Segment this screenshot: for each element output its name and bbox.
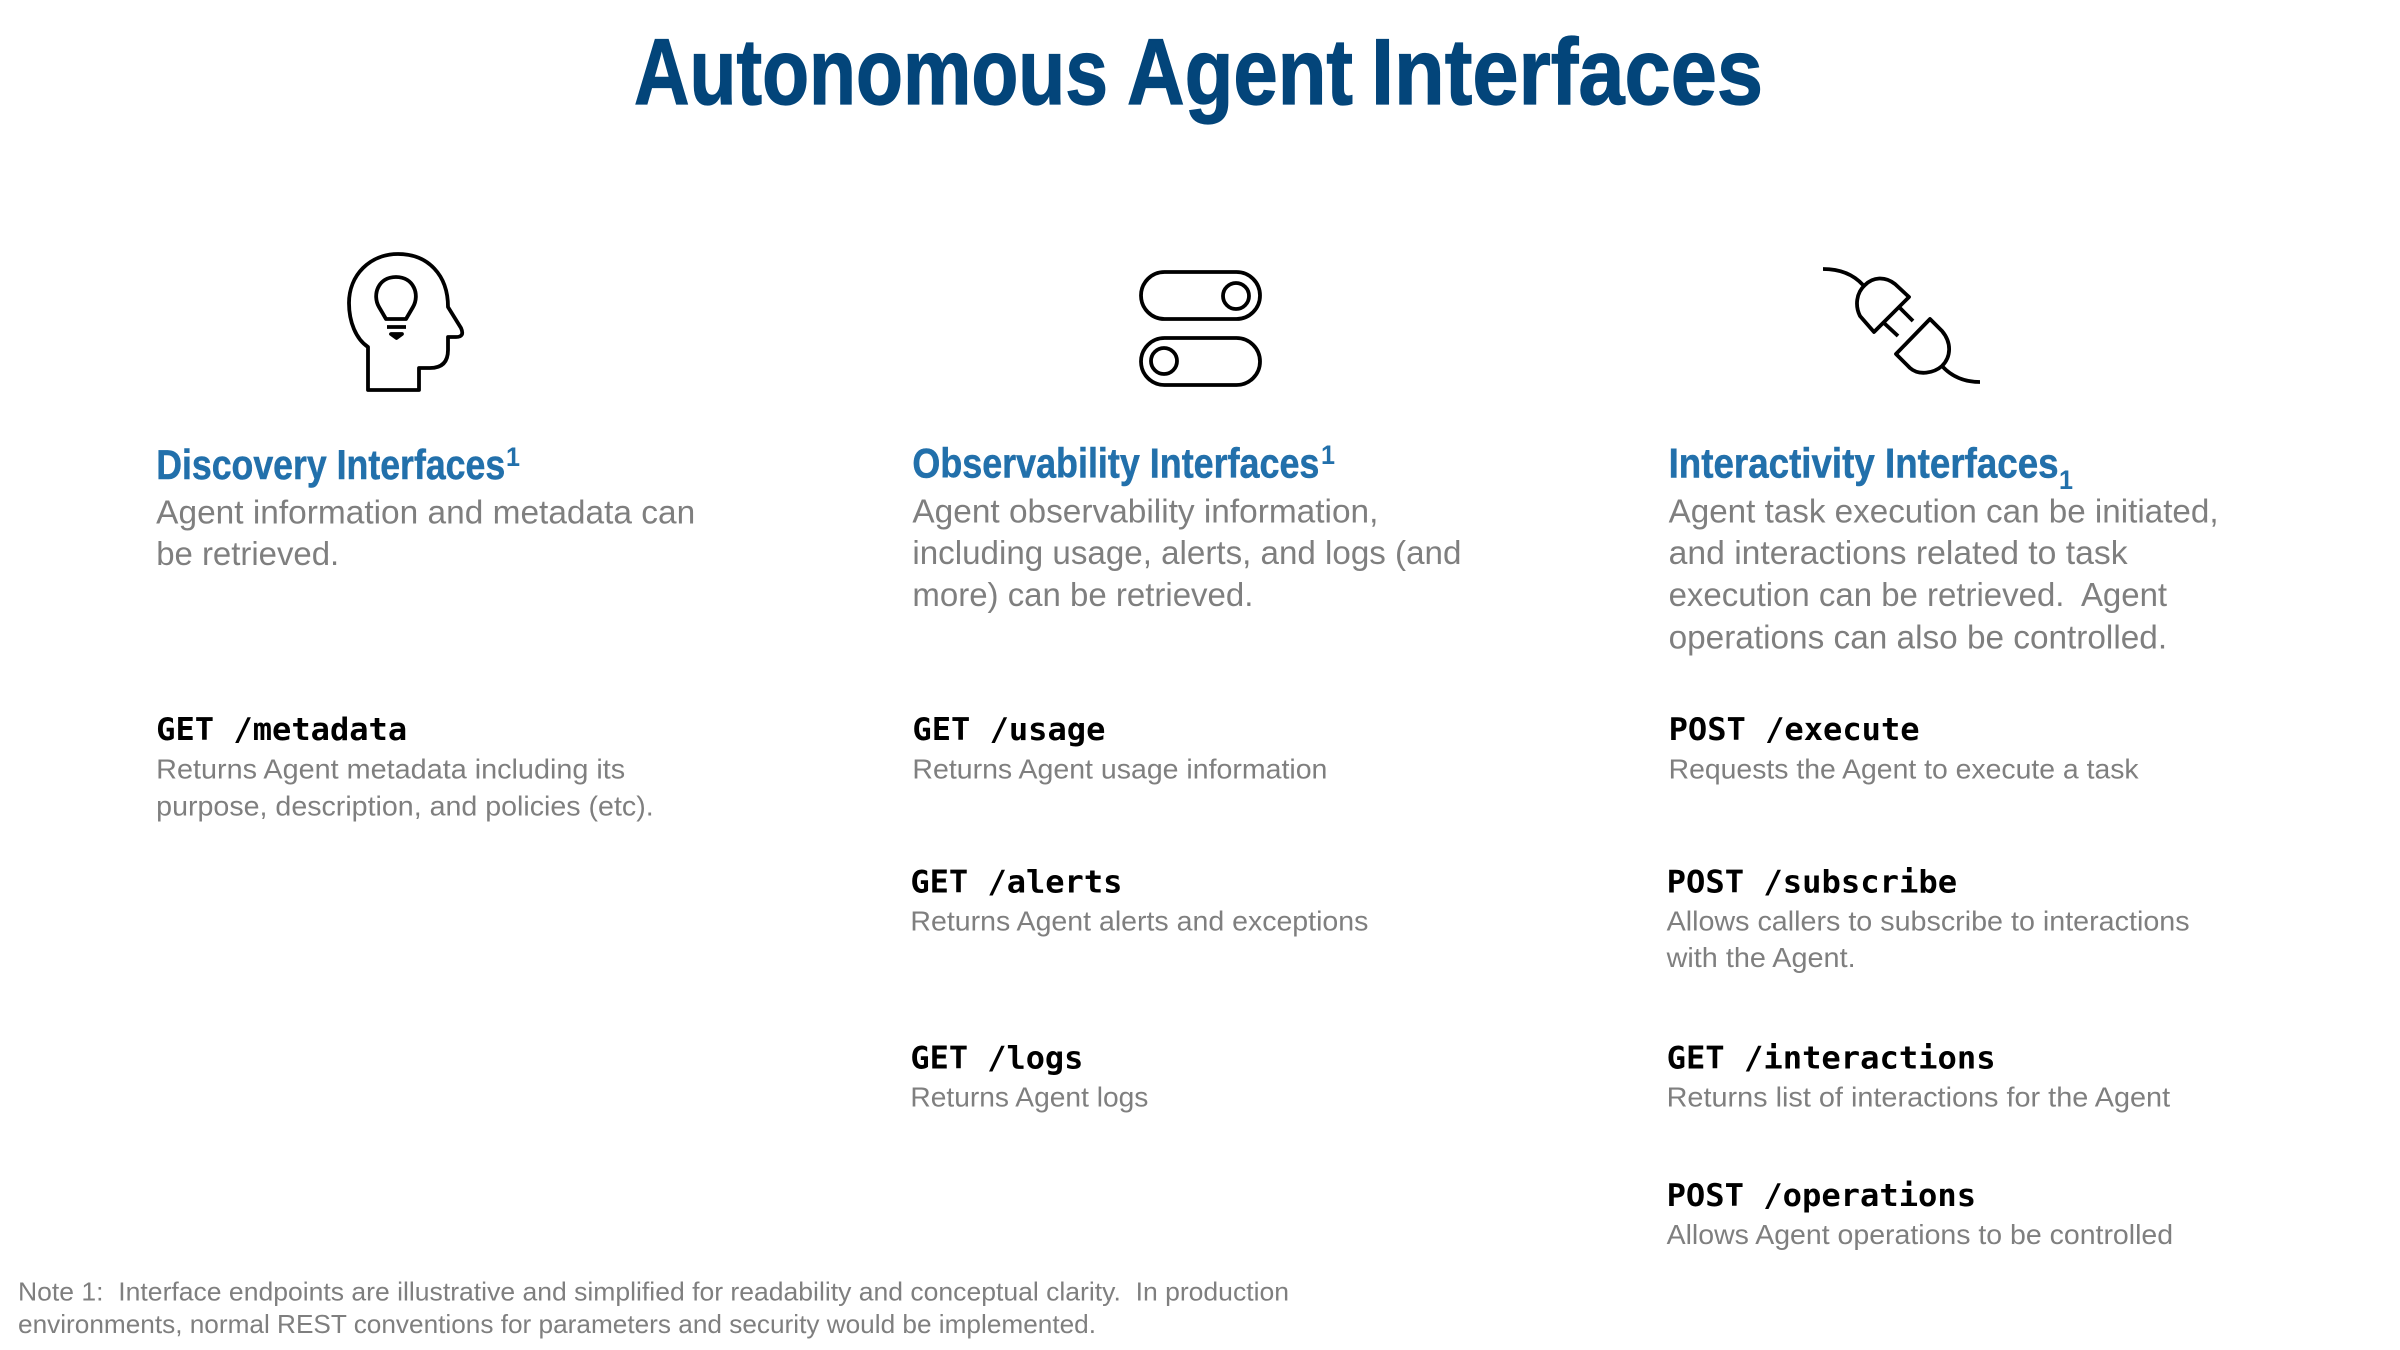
endpoint: POST /operations: POST /operations [1667,1178,1976,1214]
endpoint: GET /usage: Returns Agent usage information [912,754,1327,784]
endpoint: POST /subscribe: Allows callers to subscribe to interactions [1667,905,2190,936]
interactivity description: operations can also be controlled. [1669,619,2167,656]
icon: plug and socket [1823,269,1980,382]
discovery description [156,493,695,572]
endpoint: POST /execute [1669,712,2140,784]
heading: discovery: 1 [506,442,520,472]
observability description [912,492,1461,613]
panel: discovery interfaces [156,254,695,822]
endpoint: GET /logs: Returns Agent logs [910,1081,1148,1112]
endpoint: GET /usage: GET /usage [912,712,1105,748]
interactivity description: execution can be retrieved. Agent [1669,576,2167,613]
discovery description: Agent information and metadata can [156,493,695,530]
panel: observability interfaces [910,272,1461,1112]
endpoint: GET /alerts: Returns Agent alerts and exceptions [910,905,1368,936]
interactivity description [1669,492,2219,656]
endpoint: GET /metadata: Returns Agent metadata including its [156,754,625,784]
interactivity description: and interactions related to task [1669,534,2128,571]
endpoint: POST /operations [1667,1178,2173,1250]
icon: head with lightbulb [349,254,462,390]
endpoint: POST /execute: Requests the Agent to execute a task [1669,754,2140,784]
footnote: Note 1: Interface endpoints are illustrative and simplified for readability and conceptual clarity. In production [18,1276,1289,1306]
observability description: more) can be retrieved. [912,576,1253,613]
endpoint: GET /alerts: GET /alerts [910,864,1122,900]
endpoint: GET /metadata: purpose, description, and policies (etc). [156,790,654,822]
heading: interactivity: Interactivity Interfaces [1669,440,2059,486]
title: Interfaces [1371,19,1763,124]
endpoint: POST /subscribe [1666,864,2190,973]
endpoint: GET /alerts [910,864,1368,936]
icon: toggle switches [1141,272,1260,385]
footnote [18,1276,1289,1339]
heading: observability: Observability Interfaces [912,440,1319,486]
endpoint: POST /operations: Allows Agent operations to be controlled [1667,1219,2173,1250]
endpoint: POST /subscribe: with the Agent. [1666,942,1856,973]
title: Autonomous [634,19,1108,124]
endpoint: GET /usage [912,712,1327,784]
observability description: including usage, alerts, and logs (and [912,534,1461,571]
endpoint: GET /logs: GET /logs [910,1041,1083,1077]
heading: interactivity: 1 [2059,465,2073,495]
title [634,19,1763,124]
endpoint: GET /interactions: GET /interactions [1667,1041,1996,1077]
endpoint: GET /metadata: GET /metadata [156,712,407,748]
panel: interactivity interfaces [1666,269,2219,1250]
endpoint: POST /execute: POST /execute [1669,712,1920,748]
endpoint: GET /logs [910,1041,1148,1112]
endpoint: GET /metadata [156,712,654,822]
interactivity description: Agent task execution can be initiated, [1669,492,2219,529]
footnote: environments, normal REST conventions for parameters and security would be implemented. [18,1309,1096,1339]
endpoint: GET /interactions [1667,1041,2170,1112]
endpoint: POST /subscribe: POST /subscribe [1667,864,1957,900]
title: Agent [1127,19,1353,124]
observability description: Agent observability information, [912,492,1378,529]
discovery description: be retrieved. [156,535,339,572]
endpoint: GET /interactions: Returns list of interactions for the Agent [1667,1081,2170,1112]
heading: observability: 1 [1321,440,1335,470]
heading: discovery: Discovery Interfaces [156,441,505,488]
